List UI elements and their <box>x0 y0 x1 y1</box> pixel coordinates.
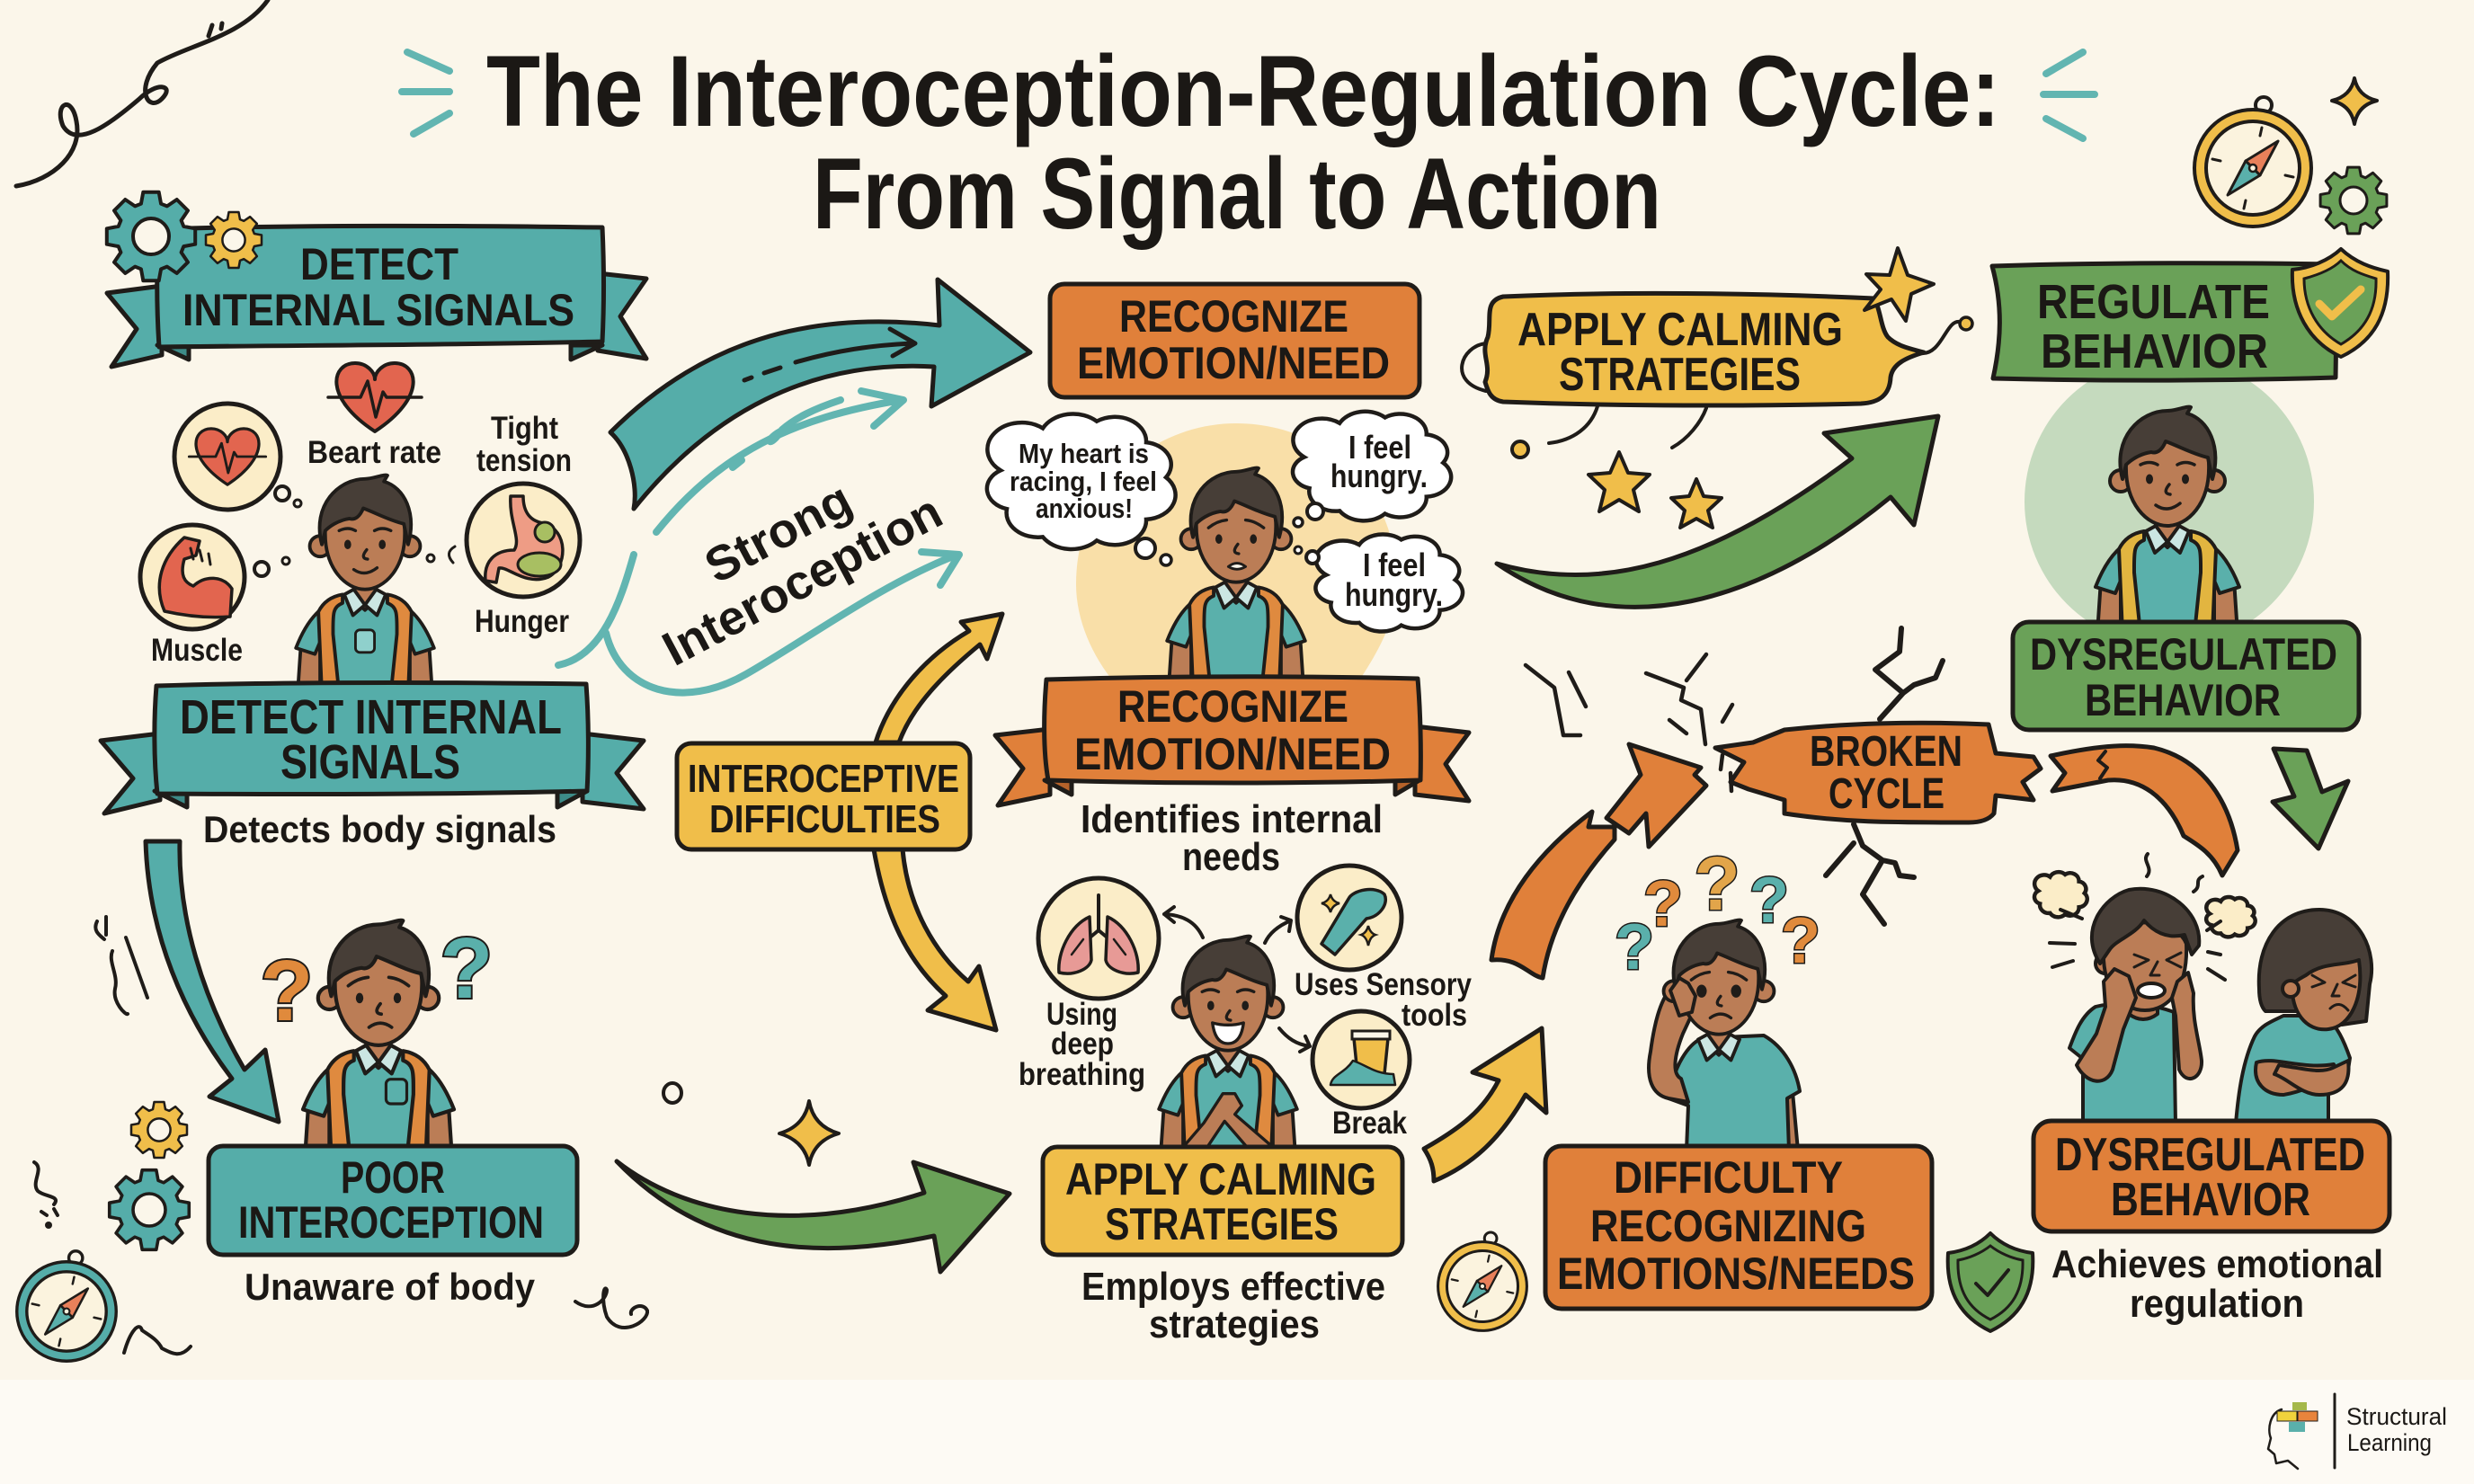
arrow: orange curve to dysregulated <box>2051 746 2238 875</box>
label: using deep breathing: breathing <box>1019 1057 1145 1092</box>
label: strong interoception: Interoception <box>654 484 951 677</box>
panel: dysregulated behavior orange: DYSREGULATED <box>2055 1129 2365 1181</box>
arrow: yellow to difficulty <box>1424 1028 1546 1181</box>
icon: lungs circle <box>1038 878 1159 999</box>
panel: broken cycle: BROKEN <box>1810 728 1962 776</box>
caption: achieves emotional regulation <box>2051 1242 2383 1326</box>
icon: compass small gold <box>1438 1232 1526 1330</box>
panel: detect internal signals ribbon top: DETECT <box>300 239 458 289</box>
panel: interoceptive difficulties: INTEROCEPTIVE <box>688 757 959 801</box>
panel: dysregulated behavior green: BEHAVIOR <box>2085 675 2281 725</box>
panel: broken cycle: CYCLE <box>1829 770 1944 818</box>
icon: heart thought bubble <box>174 404 301 510</box>
character: dysregulated girl <box>2236 910 2372 1124</box>
panel: regulate behavior <box>1992 263 2337 380</box>
panel: apply calming strategies lower: APPLY CALMING <box>1065 1154 1376 1204</box>
thought bubble: hungry one: I feel <box>1348 429 1411 466</box>
panel: apply calming strategies lower <box>1043 1147 1402 1255</box>
logo: structural learning: Structural <box>2346 1403 2447 1430</box>
character: boy difficulty recognizing <box>1649 920 1800 1151</box>
caption: employs effective strategies: Employs effective <box>1081 1265 1385 1309</box>
thought bubble: heart racing: racing, I feel <box>1010 466 1157 497</box>
logo: structural learning <box>2268 1394 2447 1469</box>
panel: apply calming strategies top <box>1462 248 1934 405</box>
thought bubble: hungry two: I feel <box>1363 547 1426 583</box>
arrow: yellow up <box>876 614 1002 742</box>
icon: shield with check gold <box>2292 249 2388 357</box>
arrow: teal down to poor interoception <box>146 841 279 1122</box>
thought bubble: hungry two <box>1295 535 1463 632</box>
arrow: big teal to recognize <box>610 280 1030 509</box>
icon: question marks difficulty: ? <box>1781 905 1820 977</box>
panel: detect internal signals ribbon lower: DETECT INTERNAL <box>180 690 562 744</box>
icon: shield green <box>1948 1233 2033 1331</box>
caption: achieves emotional regulation: Achieves emotional <box>2051 1242 2383 1286</box>
panel: difficulty recognizing emotions: EMOTIONS/NEEDS <box>1557 1249 1915 1299</box>
panel: detect internal signals ribbon top: INTERNAL SIGNALS <box>182 285 574 335</box>
icon: question marks poor: ? <box>261 943 313 1039</box>
icon: sparkle top right <box>2332 78 2377 124</box>
caption: identifies internal needs: Identifies internal <box>1081 797 1383 841</box>
icon: green gear <box>2320 167 2387 234</box>
arrow: green large up <box>1497 416 1938 607</box>
panel: dysregulated behavior orange <box>2033 1121 2389 1231</box>
icon: compass top right <box>2194 97 2311 227</box>
label: muscle: Muscle <box>151 633 243 668</box>
panel: poor interoception: POOR <box>341 1152 445 1203</box>
panel: broken cycle <box>1715 723 2041 822</box>
panel: recognize emotion ribbon: RECOGNIZE <box>1117 681 1348 732</box>
label: using deep breathing <box>1019 997 1145 1092</box>
thought bubble: heart racing <box>987 413 1176 565</box>
arrow: broken orange head piece <box>1606 744 1706 847</box>
label: break: Break <box>1332 1106 1407 1141</box>
title: The Interoception-Regulation Cycle: <box>486 35 2000 147</box>
panel: apply calming strategies top: APPLY CALMING <box>1517 304 1843 356</box>
label: tight tension: Tight <box>491 411 558 446</box>
character: boy poor interoception <box>303 920 454 1159</box>
label: using deep breathing: Using <box>1046 997 1117 1032</box>
arrow: broken orange shaft <box>1491 812 1615 978</box>
icon: sensory tool circle <box>1297 866 1402 970</box>
label: strong interoception: Strong <box>696 472 860 594</box>
icon: break circle <box>1313 1011 1410 1108</box>
arrow: yellow down <box>874 849 996 1030</box>
panel: poor interoception <box>209 1146 577 1255</box>
panel: interoceptive difficulties: DIFFICULTIES <box>709 797 940 841</box>
panel: poor interoception: INTEROCEPTION <box>238 1197 544 1248</box>
label: hunger: Hunger <box>475 604 569 639</box>
caption: identifies internal needs <box>1081 797 1383 879</box>
panel: apply calming strategies lower: STRATEGIES <box>1105 1199 1339 1249</box>
title <box>402 35 2095 250</box>
panel: dysregulated behavior green <box>2013 622 2359 730</box>
caption: employs effective strategies: strategies <box>1149 1302 1320 1346</box>
character: regulated boy <box>2096 407 2239 634</box>
panel: dysregulated behavior orange: BEHAVIOR <box>2111 1174 2310 1226</box>
panel: detect internal signals ribbon lower <box>101 682 644 813</box>
caption: unaware of body: Unaware of body <box>245 1266 536 1308</box>
panel: recognize emotion ribbon: EMOTION/NEED <box>1074 729 1391 779</box>
thought bubble: hungry two: hungry. <box>1345 576 1443 613</box>
arrow: green down <box>2273 749 2348 849</box>
arrows: small strategy pointers <box>1164 907 1310 1052</box>
character: boy recognizing <box>1167 468 1305 686</box>
icon: question marks poor: ? <box>441 920 493 1017</box>
panel: regulate behavior: BEHAVIOR <box>2041 324 2268 378</box>
icon: gears top left <box>107 192 262 280</box>
caption: employs effective strategies <box>1081 1265 1385 1346</box>
icon: decorative gears and compass bottom left <box>17 1102 647 1361</box>
panel: regulate behavior: REGULATE <box>2037 275 2270 329</box>
icon: big heart rate <box>328 363 422 431</box>
glow behind boy <box>1076 423 1397 683</box>
panel: recognize emotion ribbon <box>995 677 1469 805</box>
caption: achieves emotional regulation: regulation <box>2130 1282 2304 1326</box>
title: From Signal to Action <box>813 138 1661 250</box>
thought bubble: heart racing: My heart is <box>1019 438 1149 469</box>
icon: question marks difficulty <box>1615 841 1820 983</box>
icon: question marks difficulty: ? <box>1643 868 1683 940</box>
label: tight tension: tension <box>476 443 572 478</box>
icon: cracks around broken cycle <box>1526 628 1943 924</box>
icon: question marks poor <box>261 920 493 1039</box>
icon: muscle thought bubble <box>140 525 289 629</box>
icon: question marks difficulty: ? <box>1694 841 1740 926</box>
panel: detect internal signals ribbon lower: SIGNALS <box>280 735 460 789</box>
label: heart rate: Beart rate <box>307 435 441 470</box>
green circle behind happy boy <box>2025 357 2314 646</box>
thought bubble: hungry one <box>1293 412 1451 527</box>
label: tight tension <box>476 411 572 478</box>
character: boy applying calm <box>1159 937 1297 1154</box>
icon: sparkle star <box>663 1083 839 1165</box>
icon: strategy stars and squiggles <box>1512 317 1972 528</box>
panel: difficulty recognizing emotions: DIFFICULTY <box>1614 1152 1843 1203</box>
icon: question marks difficulty: ? <box>1615 911 1654 983</box>
caption: detects body signals: Detects body signals <box>203 808 556 850</box>
panel: recognize emotion top: EMOTION/NEED <box>1077 338 1390 388</box>
panel: detect internal signals ribbon top <box>107 226 646 367</box>
label: uses sensory tools: Uses Sensory <box>1295 967 1472 1002</box>
panel: dysregulated behavior green: DYSREGULATED <box>2030 629 2337 680</box>
character: boy detecting signals <box>296 475 434 693</box>
arrow: green lower <box>617 1161 1010 1272</box>
panel: apply calming strategies top: STRATEGIES <box>1559 349 1801 401</box>
arrow: thin teal strong interoception <box>558 391 959 693</box>
icon: steam puffs and stress marks <box>2034 854 2256 980</box>
label: uses sensory tools <box>1295 967 1472 1033</box>
label: using deep breathing: deep <box>1051 1026 1114 1062</box>
character: dysregulated boy <box>2069 889 2202 1124</box>
thought bubble: hungry one: hungry. <box>1330 458 1428 494</box>
panel: difficulty recognizing emotions <box>1545 1146 1932 1309</box>
panel: difficulty recognizing emotions: RECOGNIZING <box>1590 1201 1866 1251</box>
caption: identifies internal needs: needs <box>1182 835 1280 879</box>
panel: recognize emotion top: RECOGNIZE <box>1119 291 1348 342</box>
label: uses sensory tools: tools <box>1402 998 1467 1033</box>
thought bubble: heart racing: anxious! <box>1036 493 1133 524</box>
logo: structural learning: Learning <box>2347 1429 2432 1456</box>
panel: interoceptive difficulties <box>677 743 970 849</box>
panel: recognize emotion top <box>1050 284 1419 397</box>
icon: question marks difficulty: ? <box>1749 865 1789 937</box>
icon: stomach thought bubble <box>427 484 580 597</box>
